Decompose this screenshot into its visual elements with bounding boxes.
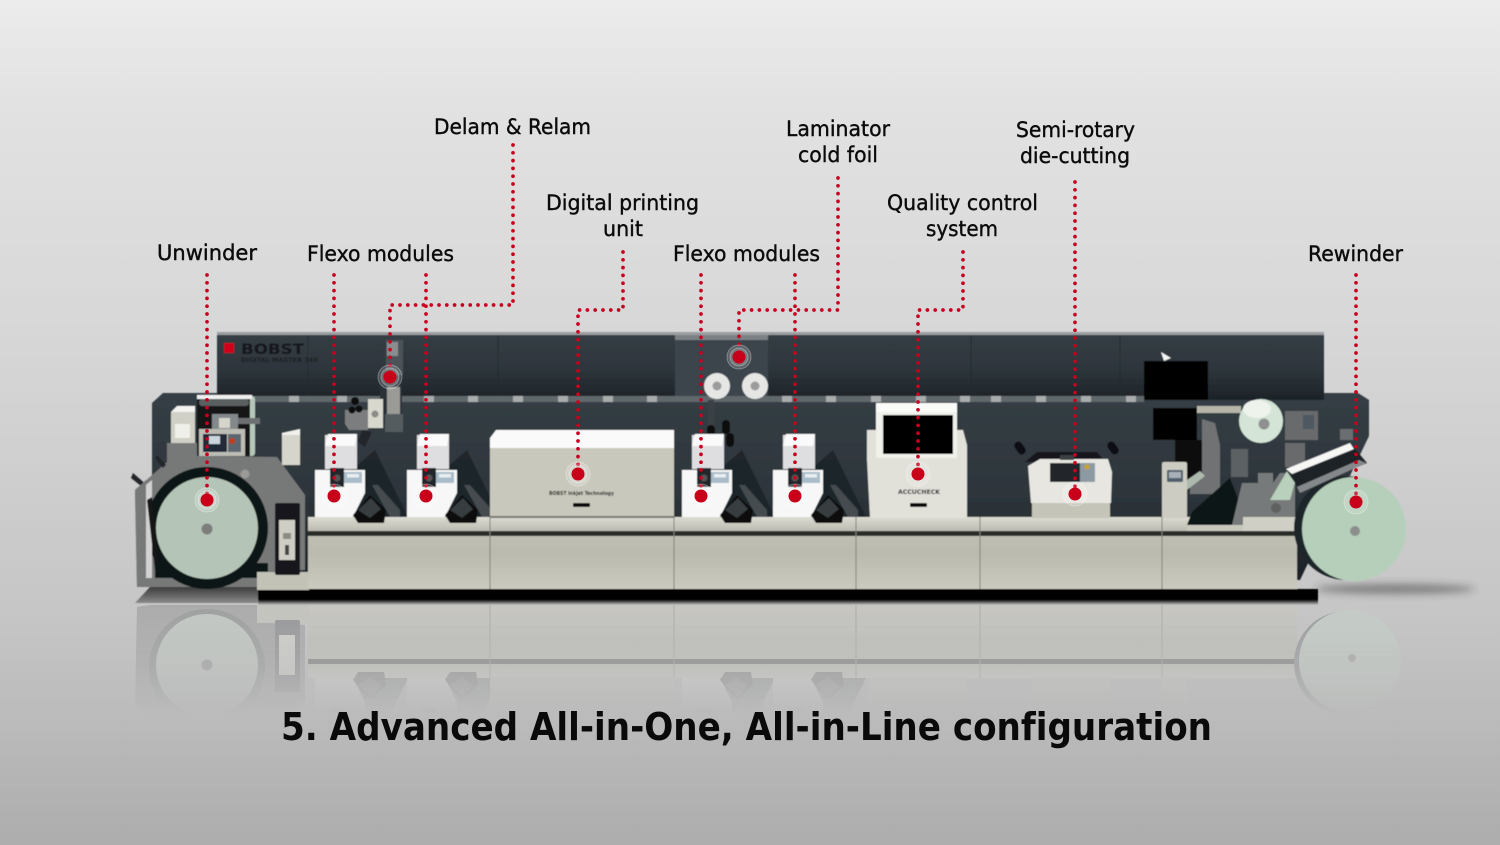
cabinets (308, 517, 1297, 589)
callout: quality control system: Quality control (887, 191, 1038, 216)
unwinder (131, 395, 309, 590)
callout: flexo modules left (307, 242, 454, 508)
brand logo (224, 342, 318, 364)
rewinder (1144, 352, 1406, 581)
quality control unit (867, 403, 967, 518)
quality control unit: ACCUCHECK (898, 489, 941, 496)
lower wall (152, 393, 1369, 580)
callout: unwinder: Unwinder (157, 241, 257, 266)
callout: semi-rotary die-cutting (1016, 118, 1135, 506)
callout: laminator cold foil: cold foil (798, 143, 878, 168)
wall seams (308, 335, 1120, 400)
callout: digital printing unit: unit (603, 217, 643, 242)
floor reflection of machine (136, 605, 1356, 700)
delam and relam unit (345, 340, 403, 447)
callout: flexo modules left: Flexo modules (307, 242, 454, 267)
flexo modules right (682, 434, 866, 523)
callout: unwinder (157, 241, 257, 512)
title: 5. Advanced All-in-One, All-in-Line configuration (281, 705, 1212, 750)
callout: delam and relam (378, 115, 591, 389)
callout: flexo modules right: Flexo modules (673, 242, 820, 267)
callout: quality control system: system (926, 217, 998, 242)
centre panel (675, 335, 768, 402)
rear wall (217, 333, 1324, 401)
machine (131, 332, 1475, 605)
brand logo: DIGITAL MASTER 340 (241, 356, 318, 364)
digital printing unit: BOBST Inkjet Technology (549, 491, 614, 497)
callout: quality control system (887, 191, 1038, 486)
laminator rolls (704, 373, 768, 447)
base plate (135, 587, 258, 603)
callout: semi-rotary die-cutting: die-cutting (1020, 144, 1130, 169)
callout: delam and relam: Delam & Relam (434, 115, 591, 140)
callout: digital printing unit: Digital printing (546, 191, 699, 216)
brand logo: BOBST (241, 342, 305, 358)
callout: flexo modules right (673, 242, 820, 508)
callout: laminator cold foil (727, 117, 890, 369)
callout: digital printing unit (546, 191, 699, 486)
callout: laminator cold foil: Laminator (786, 117, 890, 142)
semi-rotary die-cutting unit (1013, 440, 1120, 518)
digital printing unit (490, 430, 674, 518)
callout: rewinder (1308, 242, 1403, 514)
callout: semi-rotary die-cutting: Semi-rotary (1016, 118, 1135, 143)
flexo modules left (315, 434, 500, 523)
shadow under machine (258, 589, 1318, 605)
callout: rewinder: Rewinder (1308, 242, 1403, 267)
floor shadow (1315, 584, 1475, 594)
rail (217, 396, 1144, 402)
